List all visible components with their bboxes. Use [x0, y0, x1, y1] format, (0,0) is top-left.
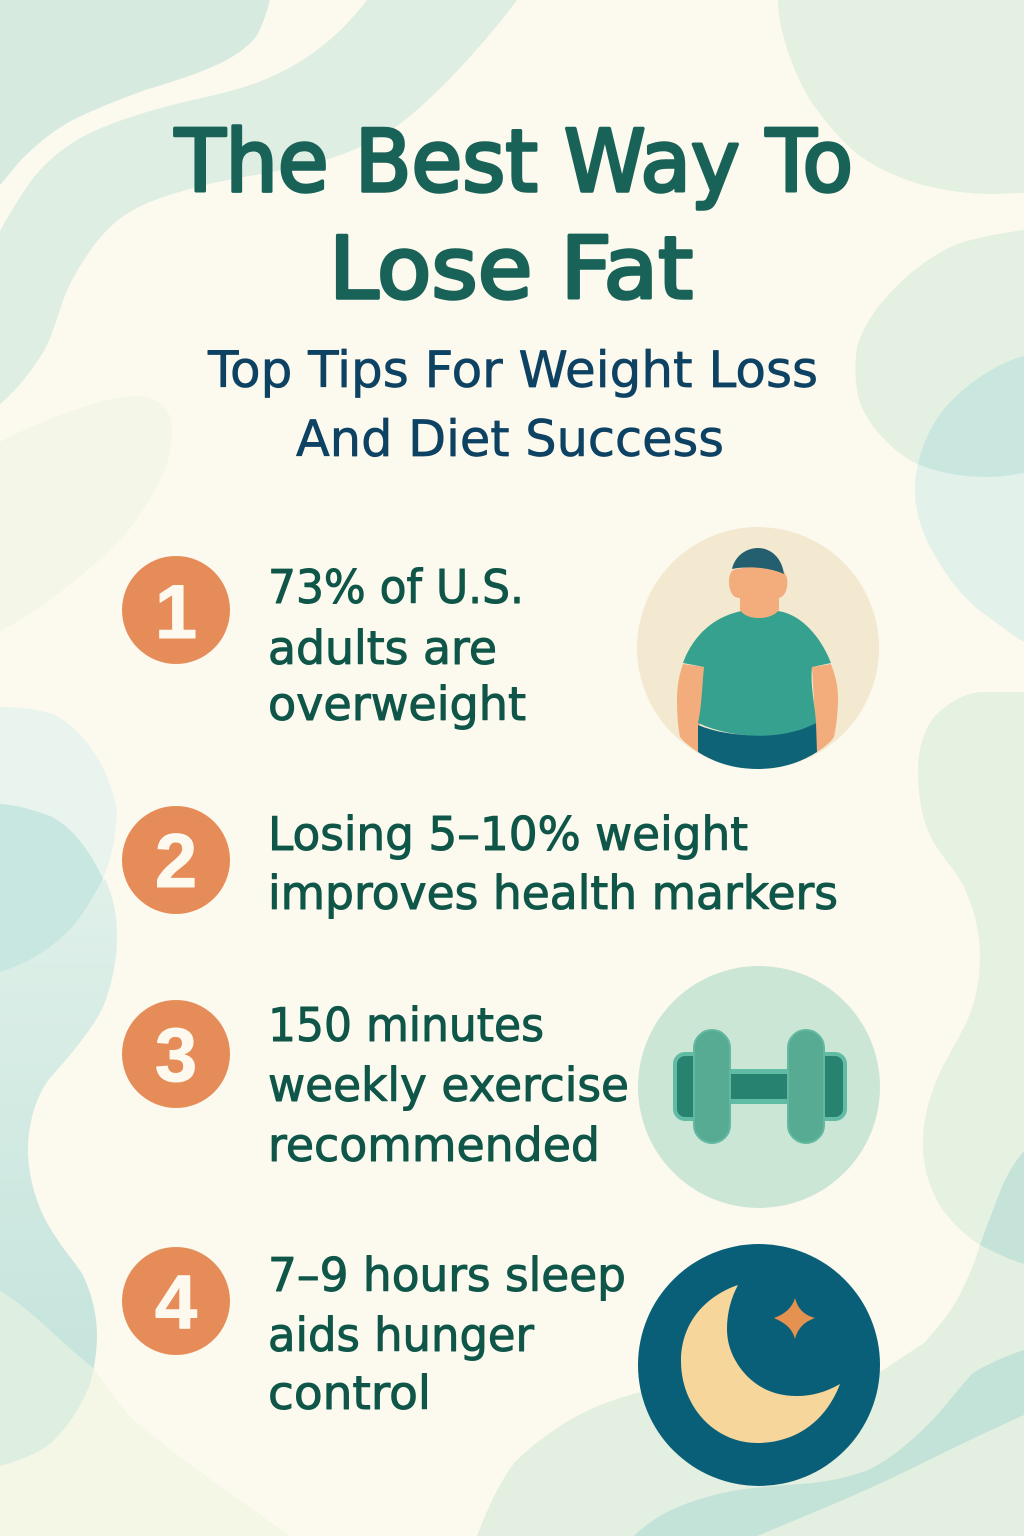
subtitle: And Diet Success — [296, 410, 724, 468]
tip 1 — [122, 527, 879, 769]
title: The Best Way To — [174, 112, 853, 212]
number badge 4: 4 — [155, 1260, 197, 1345]
tip 4 text: aids hunger — [268, 1308, 534, 1362]
tip 3 text: recommended — [268, 1118, 600, 1172]
tip 3 — [122, 966, 880, 1208]
number badge 1: 1 — [155, 570, 197, 655]
number badge 3 — [122, 1000, 230, 1108]
icon: overweight person — [637, 527, 879, 769]
icon: dumbbell — [638, 966, 880, 1208]
tip 2 text: Losing 5–10% weight — [268, 807, 748, 861]
number badge 2 — [122, 806, 230, 914]
icon: moon and star — [638, 1244, 880, 1486]
tip 3 text: weekly exercise — [268, 1058, 629, 1112]
tip 2 text: improves health markers — [268, 866, 838, 920]
tip 3 text — [268, 998, 629, 1172]
title — [174, 112, 853, 319]
tip 3 text: 150 minutes — [268, 998, 544, 1052]
number badge 3: 3 — [155, 1013, 197, 1098]
tip 4 — [122, 1244, 880, 1486]
number badge 4 — [122, 1247, 230, 1355]
tip 2 — [122, 806, 838, 920]
tip 4 text: control — [268, 1366, 431, 1420]
tip 1 text: adults are — [268, 621, 497, 675]
tip 2 text — [268, 807, 838, 920]
tip 1 text: overweight — [268, 677, 526, 731]
number badge 2: 2 — [155, 819, 197, 904]
subtitle — [207, 341, 818, 468]
tip 1 text — [268, 560, 526, 731]
tip 4 text: 7–9 hours sleep — [268, 1248, 626, 1302]
tip 1 text: 73% of U.S. — [268, 560, 524, 614]
subtitle: Top Tips For Weight Loss — [207, 341, 818, 399]
title: Lose Fat — [329, 219, 693, 319]
tip 4 text — [268, 1248, 626, 1420]
number badge 1 — [122, 556, 230, 664]
